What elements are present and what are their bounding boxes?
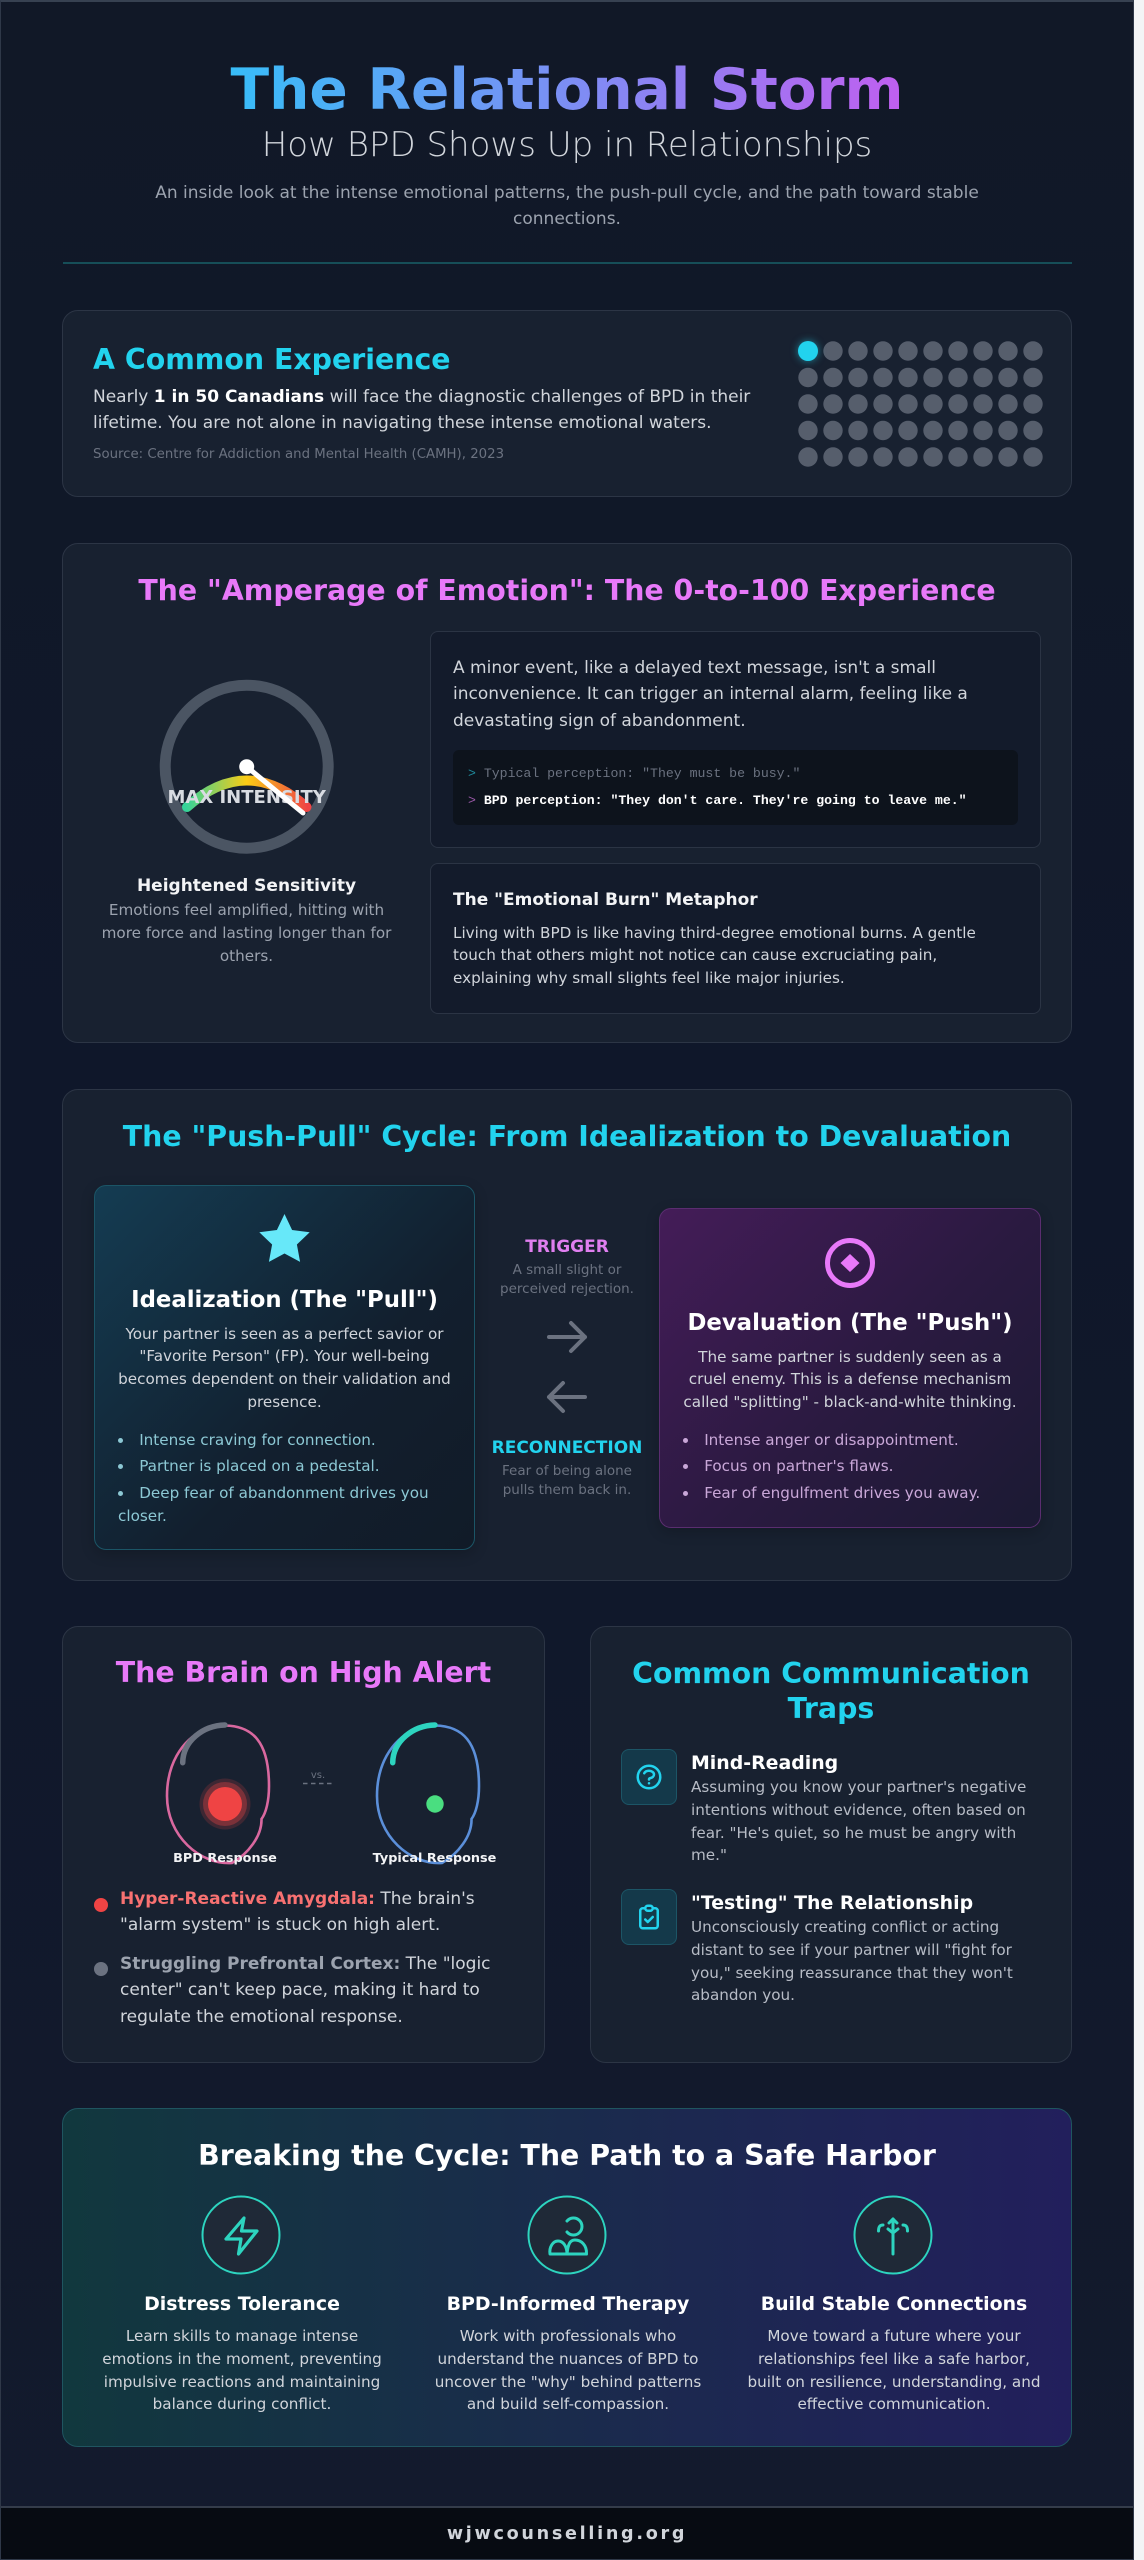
- text: emotional burn: [453, 924, 976, 987]
- text: mind-reading: me.": [691, 1846, 727, 1864]
- panel: a common experience: [62, 310, 1072, 497]
- label: reconnection: RECONNECTION: [492, 1438, 642, 1458]
- card: minor event: [430, 631, 1041, 848]
- footer: website: wjwcounselling.org: [447, 2524, 687, 2544]
- title: The Relational Storm: [230, 57, 904, 123]
- heading: amperage of emotion: The "Amperage of Emotion": The 0-to-100 Experience: [138, 574, 996, 606]
- heading: breaking the cycle: Breaking the Cycle: The Path to a Safe Harbor: [198, 2138, 936, 2172]
- text: reconnection: Fear of being alone: [502, 1462, 632, 1478]
- text: testing: distant to see if your partner will "fight for: [691, 1941, 1012, 1959]
- text: amygdala: Hyper-Reactive Amygdala: The brain's: [120, 1889, 475, 1909]
- gauge: max intensity: [160, 680, 334, 854]
- heading: brain on high alert: The Brain on High Alert: [116, 1656, 491, 1689]
- label: heightened sensitivity: Heightened Sensitivity: [137, 876, 356, 896]
- panel: communication traps: [590, 1626, 1072, 2063]
- text: heightened sensitivity: [102, 901, 392, 965]
- icon: growth: [854, 2196, 932, 2274]
- line: typical perception: > Typical perception: "They must be busy.": [468, 766, 800, 780]
- subtitle: How BPD Shows Up in Relationships: [262, 125, 872, 165]
- heading: testing: "Testing" The Relationship: [691, 1892, 973, 1914]
- brain: typical response: [373, 1725, 497, 1866]
- text: mind-reading: [691, 1778, 1026, 1864]
- card: emotional burn metaphor: [430, 863, 1041, 1014]
- list: idealization traits: Partner is placed on a pedestal.: [139, 1457, 380, 1475]
- text: devaluation: cruel enemy. This is a defense mechanism: [689, 1370, 1011, 1388]
- text: minor event: A minor event, like a delayed text message, isn't a small: [453, 658, 936, 678]
- text: prefrontal cortex: center" can't keep pace, making it hard to: [120, 1980, 480, 2000]
- text: prefrontal cortex: [120, 1954, 491, 2027]
- card: devaluation: [659, 1208, 1041, 1528]
- intro text: An inside look at the intense emotional patterns, the push-pull cycle, and the path toward stable: [155, 183, 979, 203]
- text: minor event: [453, 658, 968, 731]
- text: prefrontal cortex: Struggling Prefrontal Cortex: The "logic: [120, 1954, 491, 1974]
- text: build stable connections: [747, 2327, 1040, 2413]
- heading: build stable connections: Build Stable Connections: [761, 2293, 1027, 2315]
- list: devaluation traits: [683, 1431, 980, 1502]
- heading: communication traps: Common Communication: [632, 1657, 1030, 1690]
- heading: idealization: Idealization (The "Pull"): [131, 1287, 438, 1313]
- text: build stable connections: Move toward a future where your: [767, 2327, 1021, 2345]
- list: idealization traits: Deep fear of abandonment drives you: [139, 1484, 429, 1502]
- text: heightened sensitivity: more force and lasting longer than for: [102, 924, 391, 942]
- dot chart: 1 in 50: [794, 336, 1043, 467]
- heading: distress tolerance: Distress Tolerance: [144, 2293, 340, 2315]
- text: build stable connections: built on resilience, understanding, and: [747, 2373, 1040, 2391]
- label: trigger: TRIGGER: [525, 1237, 609, 1257]
- text: minor event: inconvenience. It can trigger an internal alarm, feeling like a: [453, 684, 968, 704]
- text: trigger: perceived rejection.: [500, 1281, 634, 1297]
- text: idealization: Your partner is seen as a perfect savior or: [125, 1325, 444, 1343]
- icon: question mark: [621, 1749, 677, 1805]
- text: reconnection: pulls them back in.: [503, 1482, 631, 1498]
- text: bpd-informed therapy: uncover the "why" behind patterns: [435, 2373, 701, 2391]
- text: emotional burn: Living with BPD is like having third-degree emotional burns. A gentle: [453, 924, 976, 942]
- text: bpd-informed therapy: [435, 2327, 701, 2413]
- text: reconnection: [502, 1462, 632, 1498]
- text: mind-reading: fear. "He's quiet, so he must be angry with: [691, 1824, 1016, 1842]
- text: idealization: [118, 1325, 451, 1411]
- text: testing: abandon you.: [691, 1986, 795, 2004]
- heading: emotional burn: The "Emotional Burn" Metaphor: [453, 890, 758, 910]
- text: distress tolerance: [102, 2327, 382, 2413]
- statistic text: [93, 387, 750, 433]
- gauge: max intensity: MAX INTENSITY: [168, 787, 327, 808]
- panel: brain on high alert: [62, 1626, 545, 2063]
- text: bpd-informed therapy: Work with professionals who: [460, 2327, 676, 2345]
- heading: communication traps: [632, 1657, 1030, 1725]
- footer: [0, 2506, 1134, 2560]
- text: minor event: devastating sign of abandonment.: [453, 711, 746, 731]
- list: idealization traits: closer.: [118, 1507, 167, 1525]
- list: devaluation traits: Focus on partner's flaws.: [704, 1457, 893, 1475]
- text: distress tolerance: Learn skills to manage intense: [126, 2327, 358, 2345]
- icon: lightning bolt: [202, 2196, 280, 2274]
- source: Source: Centre for Addiction and Mental Health (CAMH), 2023: [93, 446, 504, 462]
- intro text: connections.: [513, 209, 621, 229]
- text: idealization: "Favorite Person" (FP). Your well-being: [139, 1347, 430, 1365]
- text: trigger: [500, 1262, 634, 1297]
- text: bpd-informed therapy: understand the nuances of BPD to: [438, 2350, 698, 2368]
- label: vs: [303, 1770, 333, 1784]
- heading: push-pull cycle: The "Push-Pull" Cycle: From Idealization to Devaluation: [123, 1120, 1011, 1152]
- bullet: prefrontal cortex: [94, 1962, 108, 1976]
- text: testing: [691, 1918, 1013, 2004]
- intro text: [155, 183, 979, 229]
- text: amygdala: [120, 1889, 475, 1935]
- statistic text: Nearly 1 in 50 Canadians will face the diagnostic challenges of BPD in their: [93, 387, 750, 407]
- text: heightened sensitivity: others.: [220, 947, 273, 965]
- text: build stable connections: relationships feel like a safe harbor,: [758, 2350, 1030, 2368]
- text: idealization: becomes dependent on their validation and: [118, 1370, 451, 1388]
- panel: breaking the cycle: [62, 2108, 1072, 2447]
- card: idealization: [94, 1185, 475, 1550]
- label: vs: vs.: [311, 1770, 325, 1781]
- text: build stable connections: effective communication.: [797, 2395, 991, 2413]
- text: amygdala: "alarm system" is stuck on high alert.: [120, 1915, 440, 1935]
- text: distress tolerance: balance during conflict.: [153, 2395, 331, 2413]
- text: testing: you," seeking reassurance that they won't: [691, 1964, 1013, 1982]
- statistic text: lifetime. You are not alone in navigating these intense emotional waters.: [93, 413, 712, 433]
- panel: push-pull cycle: [62, 1089, 1072, 1581]
- list: devaluation traits: Intense anger or disappointment.: [704, 1431, 959, 1449]
- list: idealization traits: [118, 1431, 429, 1525]
- text: bpd-informed therapy: and build self-compassion.: [467, 2395, 669, 2413]
- arrow: left: [546, 1380, 587, 1413]
- text: idealization: presence.: [247, 1393, 322, 1411]
- text: heightened sensitivity: Emotions feel amplified, hitting with: [109, 901, 384, 919]
- line: bpd perception: > BPD perception: "They don't care. They're going to leave me.": [468, 792, 967, 808]
- icon: diamond in circle: [825, 1238, 875, 1288]
- text: mind-reading: intentions without evidence, often based on: [691, 1801, 1026, 1819]
- text: devaluation: [683, 1348, 1017, 1411]
- icon: star: [259, 1214, 310, 1262]
- heading: devaluation: Devaluation (The "Push"): [687, 1310, 1013, 1336]
- text: trigger: A small slight or: [513, 1262, 621, 1278]
- bullet: amygdala: [94, 1898, 108, 1912]
- brain: bpd response: BPD Response: [173, 1851, 277, 1866]
- text: emotional burn: explaining why small slights feel like major injuries.: [453, 969, 845, 987]
- panel: amperage of emotion: [62, 543, 1072, 1043]
- list: idealization traits: Intense craving for connection.: [139, 1431, 376, 1449]
- icon: clipboard check: [621, 1889, 677, 1945]
- text: emotional burn: touch that others might not notice can cause excruciating pain,: [453, 946, 937, 964]
- list: devaluation traits: Fear of engulfment drives you away.: [704, 1484, 980, 1502]
- diagram: brain comparison: [166, 1722, 497, 1866]
- text: mind-reading: Assuming you know your partner's negative: [691, 1778, 1026, 1796]
- text: testing: Unconsciously creating conflict or acting: [691, 1918, 999, 1936]
- brain: typical response: Typical Response: [373, 1851, 497, 1866]
- heading: mind-reading: Mind-Reading: [691, 1752, 838, 1774]
- arrow: right: [547, 1320, 587, 1353]
- icon: person: [528, 2196, 606, 2274]
- text: prefrontal cortex: regulate the emotional response.: [120, 2007, 403, 2027]
- heading: a common experience: A Common Experience: [93, 342, 451, 376]
- heading: communication traps: Traps: [788, 1692, 874, 1725]
- heading: bpd-informed therapy: BPD-Informed Therapy: [447, 2293, 689, 2315]
- code block: perception: [453, 750, 1018, 825]
- text: devaluation: called "splitting" - black-and-white thinking.: [683, 1393, 1017, 1411]
- brain: bpd response: [167, 1725, 277, 1866]
- text: devaluation: The same partner is suddenly seen as a: [698, 1348, 1002, 1366]
- text: distress tolerance: impulsive reactions and maintaining: [104, 2373, 380, 2391]
- text: distress tolerance: emotions in the moment, preventing: [102, 2350, 382, 2368]
